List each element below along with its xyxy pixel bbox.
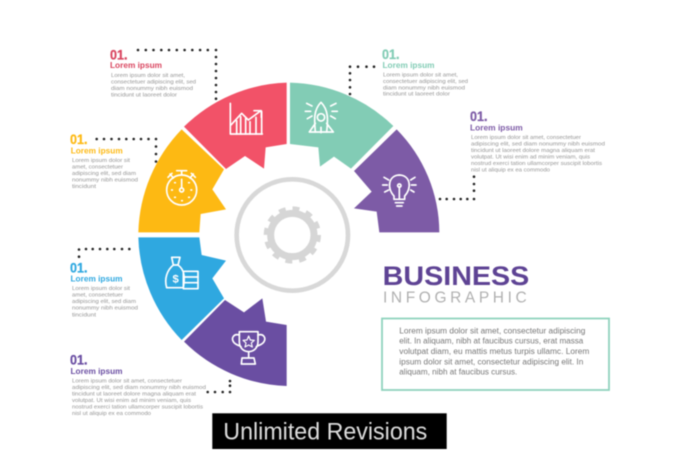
- icon: trophy: [233, 332, 265, 364]
- text block: blue: 01.: [70, 260, 88, 276]
- text block: blue: Lorem ipsum dolor sit: [72, 286, 130, 292]
- connector dots: dark purple: [206, 380, 231, 393]
- icon: growth chart: [230, 103, 262, 134]
- icon: dollar sign: $: [173, 273, 180, 285]
- text block: blue: Lorem ipsum: [70, 274, 123, 284]
- callout box: aliquam, nibh at faucibus cursus.: [399, 368, 517, 377]
- text block: dark purple: Lorem ipsum dolor sit amet, consectetuer: [72, 379, 182, 385]
- text block: teal: 01.: [382, 46, 400, 62]
- text block: dark purple: tincidunt ut laoreet dolore magna aliquam erat: [72, 392, 196, 398]
- text block: light purple: Lorem ipsum dolor sit amet, consectetuer: [471, 135, 581, 141]
- connector dots: light purple: [439, 175, 475, 200]
- text block: yellow: adipiscing elit, sed diam: [72, 171, 136, 177]
- callout box: elit. In aliquam, nibh at faucibus cursus, erat massa: [399, 337, 584, 346]
- segment: blue: [138, 237, 226, 340]
- text block: dark purple: adipiscing elit, sed diam nonummy nibh euismod: [72, 385, 206, 391]
- icon: center gear: [266, 209, 318, 261]
- icon: rocket: [305, 102, 337, 133]
- text block: light purple: adipiscing elit, sed diam nonummy nibh euismod: [471, 142, 605, 148]
- connector dots: blue: [78, 248, 131, 258]
- text block: yellow: Lorem ipsum dolor sit: [72, 158, 130, 164]
- text block: light purple: tincidunt ut laoreet dolore magna aliquam erat: [471, 148, 595, 154]
- text block: blue: nonummy nibh euismod: [72, 306, 138, 312]
- text block: blue: amet, consectetuer: [72, 292, 123, 298]
- semicircular gear diagram: [138, 83, 439, 386]
- ring around gear: [237, 179, 348, 291]
- text block: light purple: volutpat. Ut wisi enim ad minim veniam, quis: [471, 154, 590, 160]
- segment: dark purple: [184, 298, 287, 386]
- text block: red: Lorem ipsum: [110, 60, 162, 70]
- text block: yellow: tincidunt: [72, 184, 97, 190]
- banner: unlimited revisions: Unlimited Revisions: [223, 419, 427, 445]
- text block: red: diam nonummy nibh euismod: [111, 86, 193, 92]
- text block: dark purple: nostrud exerci tation ullamcorper suscipit lobortis: [72, 404, 203, 410]
- connector dots: yellow: [95, 138, 157, 163]
- text block: yellow: amet, consectetuer: [72, 164, 123, 170]
- text block: light purple: nostrud exerci tation ullamcorper suscipit lobortis: [471, 161, 602, 167]
- segment: teal: [290, 83, 393, 169]
- callout box: Lorem ipsum dolor sit amet, consectetur adipiscing: [399, 326, 585, 335]
- text block: teal: consectetuer adipiscing elit, sed: [383, 79, 468, 85]
- text block: yellow: [70, 131, 138, 190]
- text block: dark purple: [70, 352, 206, 417]
- segment: yellow: [138, 129, 226, 232]
- text block: yellow: 01.: [70, 131, 88, 147]
- text block: red: Lorem ipsum dolor sit amet,: [111, 73, 185, 79]
- callout box: [382, 318, 609, 390]
- text block: yellow: nonummy nibh euismod: [72, 178, 138, 184]
- connector dots: red: [137, 49, 217, 100]
- text block: red: 01.: [110, 46, 128, 62]
- text block: dark purple: 01.: [70, 352, 88, 368]
- text block: dark purple: Lorem ipsum: [70, 366, 123, 376]
- text block: teal: Lorem ipsum dolor sit amet,: [383, 72, 458, 78]
- connector dots: teal: [349, 65, 375, 95]
- text block: light purple: 01.: [470, 108, 488, 124]
- text block: red: tincidunt ut laoreet dolor: [111, 92, 177, 98]
- text block: blue: tincidunt: [72, 312, 97, 318]
- icon: light bulb: [383, 175, 416, 206]
- text block: blue: [70, 260, 138, 318]
- title: BUSINESS: [383, 261, 529, 291]
- callout box: ipsum dolor sit amet, consectetur adipiscing elit. In: [399, 357, 583, 366]
- text block: teal: diam nonummy nibh euismod: [383, 85, 465, 91]
- text block: teal: tincidunt ut laoreet dolor: [383, 92, 450, 98]
- text block: red: consectetuer adipiscing elit, sed: [111, 80, 196, 86]
- text block: dark purple: volutpat. Ut wisi enim ad minim veniam, quis: [72, 398, 191, 404]
- icon: stopwatch: [167, 171, 197, 205]
- segment: red: [184, 83, 287, 169]
- text block: light purple: [470, 108, 605, 174]
- text block: teal: Lorem ipsum: [382, 60, 435, 70]
- callout box: volutpat diam, eu mattis metus turpis ullamc. Lorem: [399, 347, 590, 356]
- segment: light purple: [354, 129, 439, 232]
- text block: light purple: Lorem ipsum: [470, 123, 523, 133]
- text block: dark purple: nisl ut aliquip ex ea commodo: [72, 411, 151, 417]
- title: [383, 261, 529, 307]
- text block: blue: adipiscing elit, sed diam: [72, 299, 136, 305]
- title: INFOGRAPHIC: [383, 290, 527, 307]
- text block: red: [110, 46, 196, 98]
- text block: yellow: Lorem ipsum: [71, 146, 123, 156]
- text block: light purple: nisl ut aliquip ex ea commodo: [471, 168, 550, 174]
- text block: teal: [382, 46, 468, 98]
- icon: money bag and coins: [166, 257, 198, 289]
- banner: unlimited revisions: [212, 413, 447, 449]
